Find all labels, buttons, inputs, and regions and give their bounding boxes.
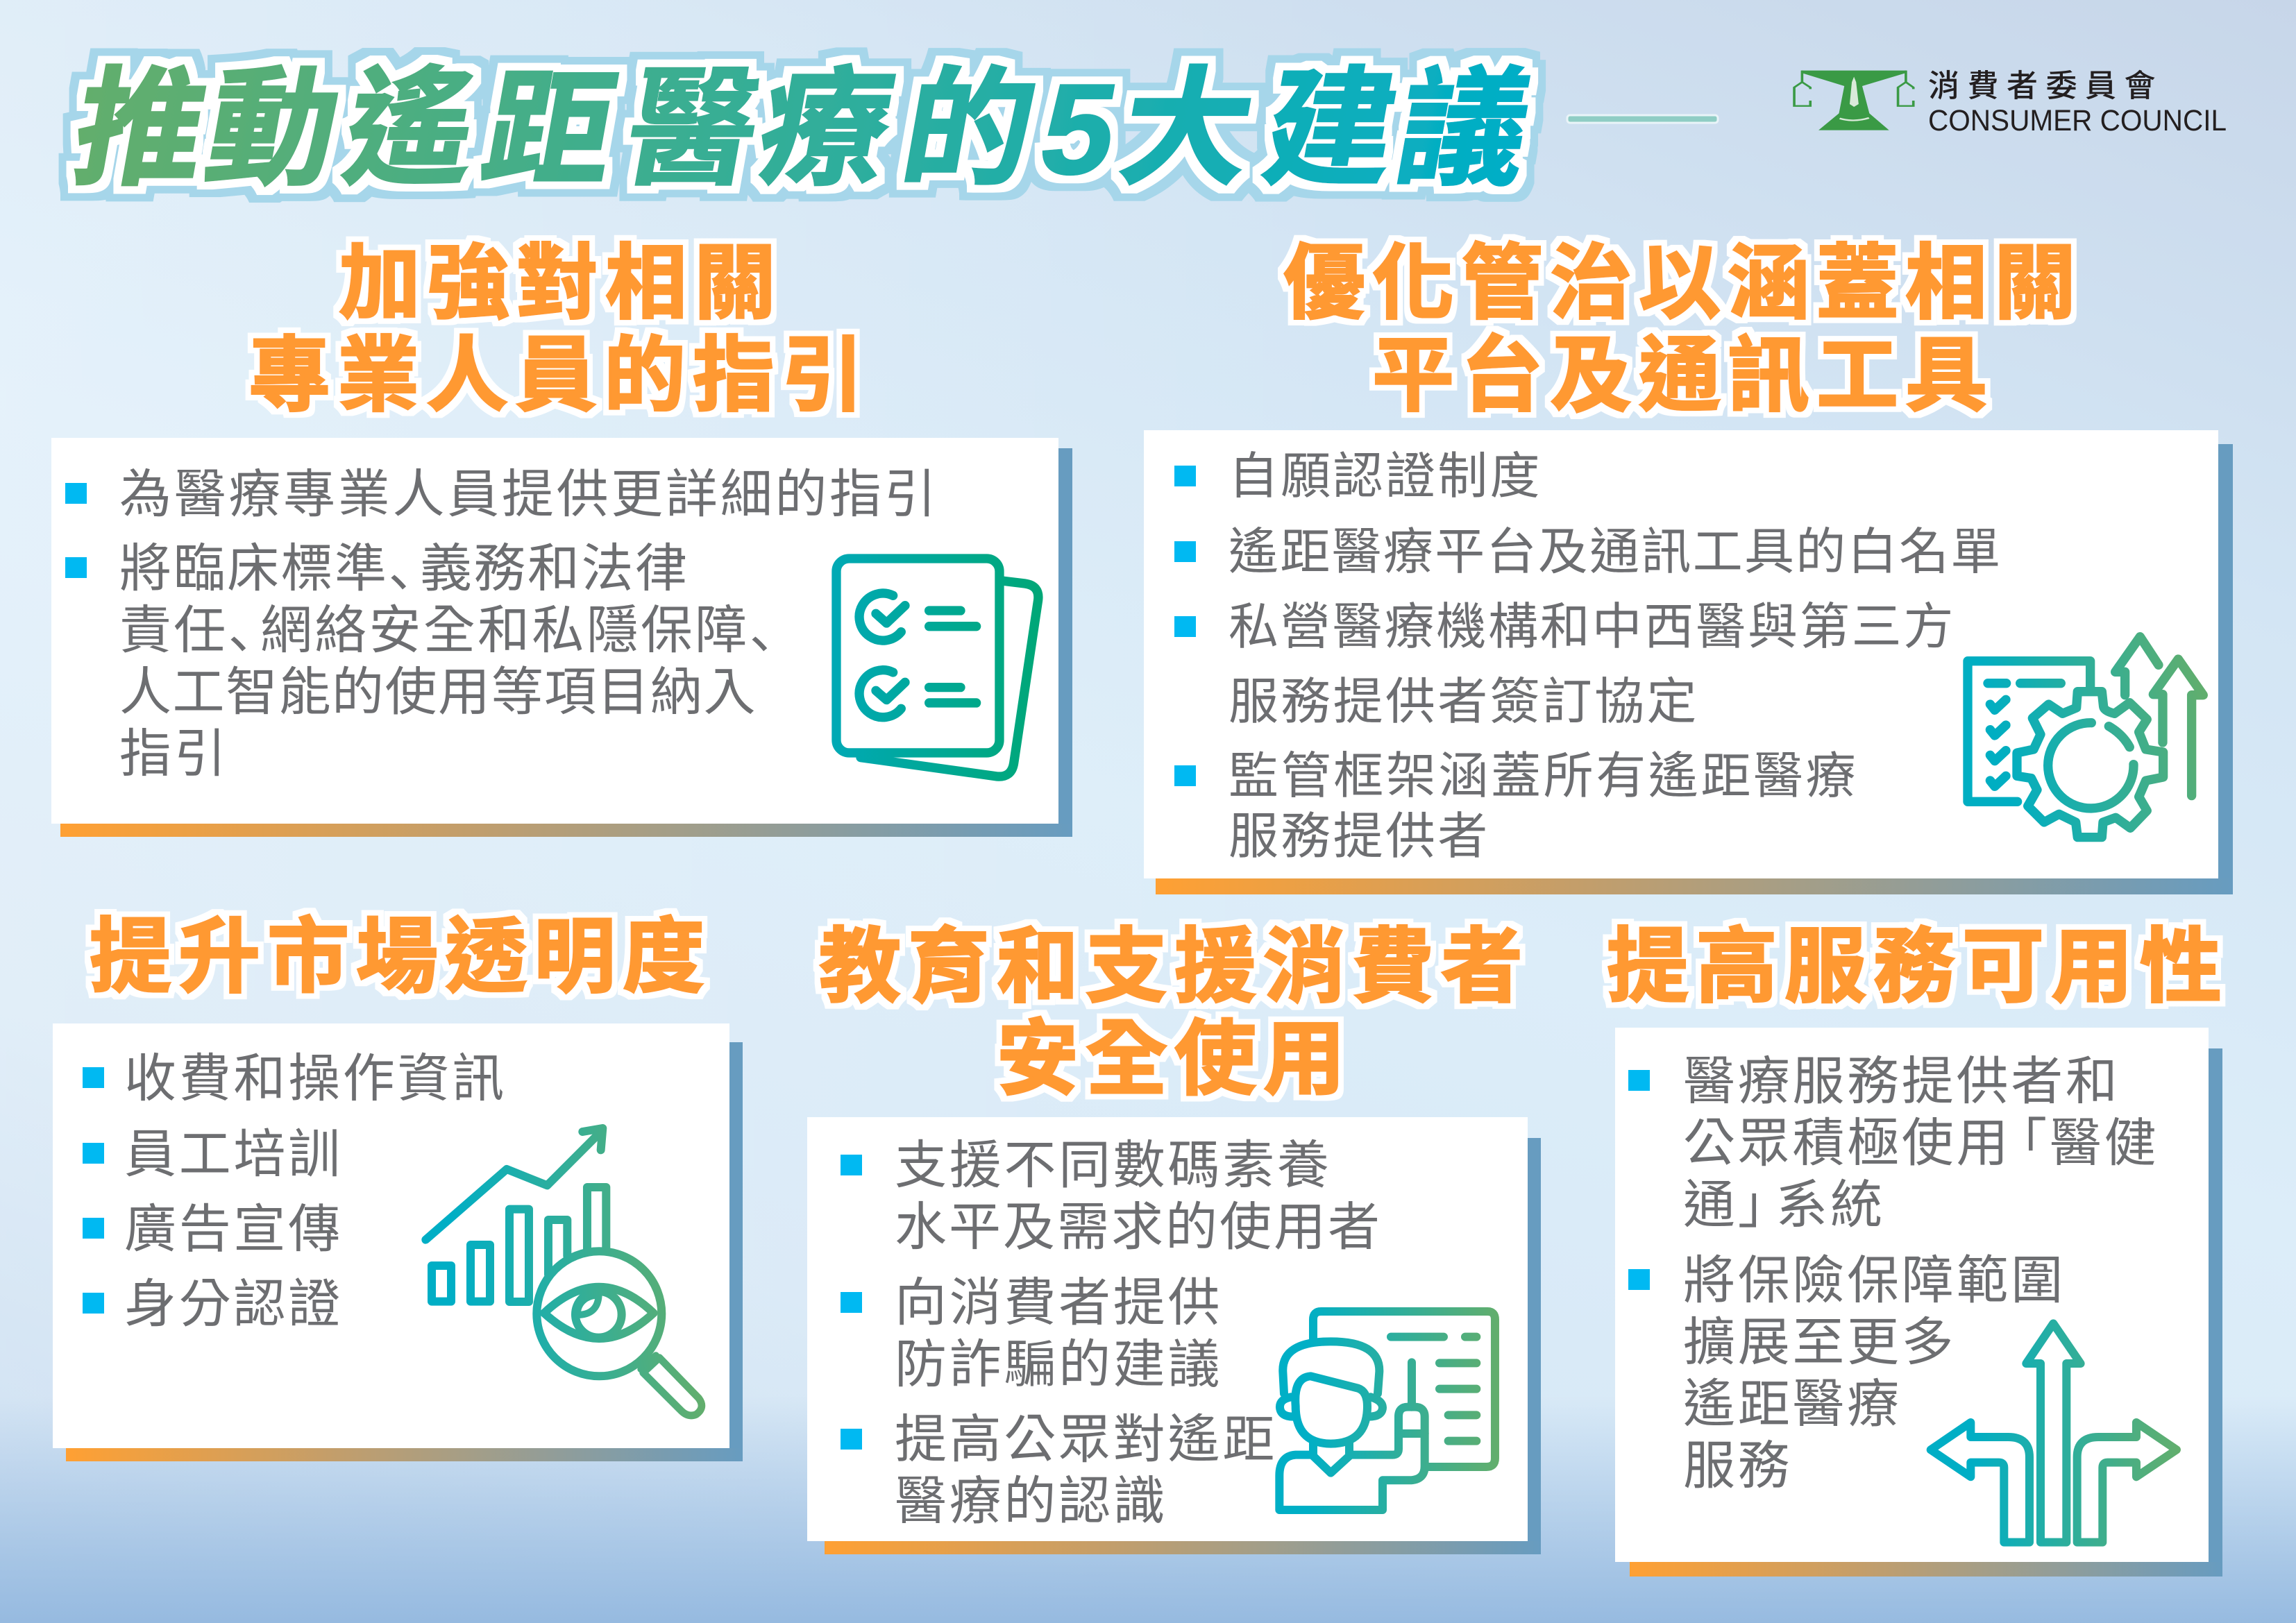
list text: 監管框架涵蓋所有遙距醫療 (1229, 749, 1858, 804)
panel: educate consumers (807, 1117, 1541, 1554)
panel: service availability (1615, 1028, 2222, 1577)
list text: 醫療的認識 (895, 1472, 1168, 1530)
icon: chart and magnifier (425, 1128, 702, 1416)
list text: 通」系統 (1683, 1175, 1885, 1234)
heading: governance (1283, 238, 2083, 422)
bullets (1174, 466, 1196, 786)
heading: market transparency: 提升市場透明度 (90, 912, 711, 1003)
title: 推動遙距醫療的5大建議 (64, 57, 1541, 201)
list text: 服務提供者簽訂協定 (1229, 674, 1699, 730)
heading: governance: 優化管治以涵蓋相關 (1283, 238, 2083, 330)
list text: 自願認證制度 (1229, 449, 1542, 504)
list text: 身分認證 (124, 1275, 343, 1333)
heading: educate consumers: 教育和支援消費者 (819, 921, 1530, 1013)
bullets (841, 1155, 862, 1450)
list text: 廣告宣傳 (124, 1200, 343, 1258)
panel: governance (1144, 430, 2233, 894)
title divider line (1567, 115, 1718, 123)
bullets (1628, 1070, 1650, 1290)
list text: 責任、網絡安全和私隱保障、 (119, 601, 804, 659)
list text: 指引 (119, 724, 228, 783)
list text: 水平及需求的使用者 (895, 1198, 1382, 1256)
heading: governance: 平台及通訊工具 (1372, 330, 1994, 422)
list text: 員工培訓 (124, 1125, 343, 1183)
list text: 將臨床標準、義務和法律 (119, 539, 689, 597)
list text: 擴展至更多 (1683, 1313, 1957, 1371)
list text (124, 1049, 507, 1333)
list text (1229, 449, 2002, 865)
list text: 為醫療專業人員提供更詳細的指引 (119, 465, 939, 523)
list text: 公眾積極使用「醫健 (1683, 1114, 2159, 1172)
list text: 遙距醫療平台及通訊工具的白名單 (1229, 525, 2002, 580)
panel: guidance for professionals (51, 438, 1072, 837)
list text: 醫療服務提供者和 (1683, 1052, 2120, 1110)
logo chinese name: 消費者委員會 (1928, 68, 2163, 103)
heading: service availability: 提高服務可用性 (1607, 921, 2229, 1013)
heading: educate consumers: 安全使用 (997, 1014, 1352, 1105)
panel: market transparency (53, 1023, 743, 1461)
list text: 服務 (1683, 1436, 1792, 1495)
list text (119, 465, 939, 783)
bullets (83, 1067, 104, 1314)
list text: 私營醫療機構和中西醫與第三方 (1229, 600, 1955, 655)
logo icon: scales (1794, 71, 1914, 130)
logo english name: CONSUMER COUNCIL (1928, 104, 2227, 137)
icon: presenter and board (1279, 1311, 1495, 1510)
list text: 防詐騙的建議 (895, 1335, 1222, 1393)
list text (895, 1136, 1382, 1530)
icon: direction arrows (1931, 1323, 2177, 1543)
list text: 提高公眾對遙距 (895, 1410, 1277, 1468)
heading: educate consumers (819, 921, 1530, 1105)
heading: guidance for professionals: 加強對相關 (339, 238, 783, 330)
list text: 收費和操作資訊 (124, 1049, 507, 1107)
list text: 人工智能的使用等項目納入 (119, 663, 757, 721)
logo: consumer council (1794, 68, 2227, 137)
list text: 向消費者提供 (895, 1273, 1222, 1332)
list text: 將保險保障範圍 (1683, 1251, 2066, 1309)
list text: 遙距醫療 (1683, 1375, 1902, 1433)
icon: checklist papers (836, 559, 1038, 776)
heading: guidance for professionals (248, 238, 870, 422)
list text: 服務提供者 (1229, 809, 1490, 865)
list text (1683, 1052, 2159, 1495)
heading: guidance for professionals: 專業人員的指引 (248, 330, 870, 422)
bullets (65, 483, 87, 578)
list text: 支援不同數碼素養 (895, 1136, 1332, 1194)
icon: gear and arrows (1968, 637, 2203, 838)
